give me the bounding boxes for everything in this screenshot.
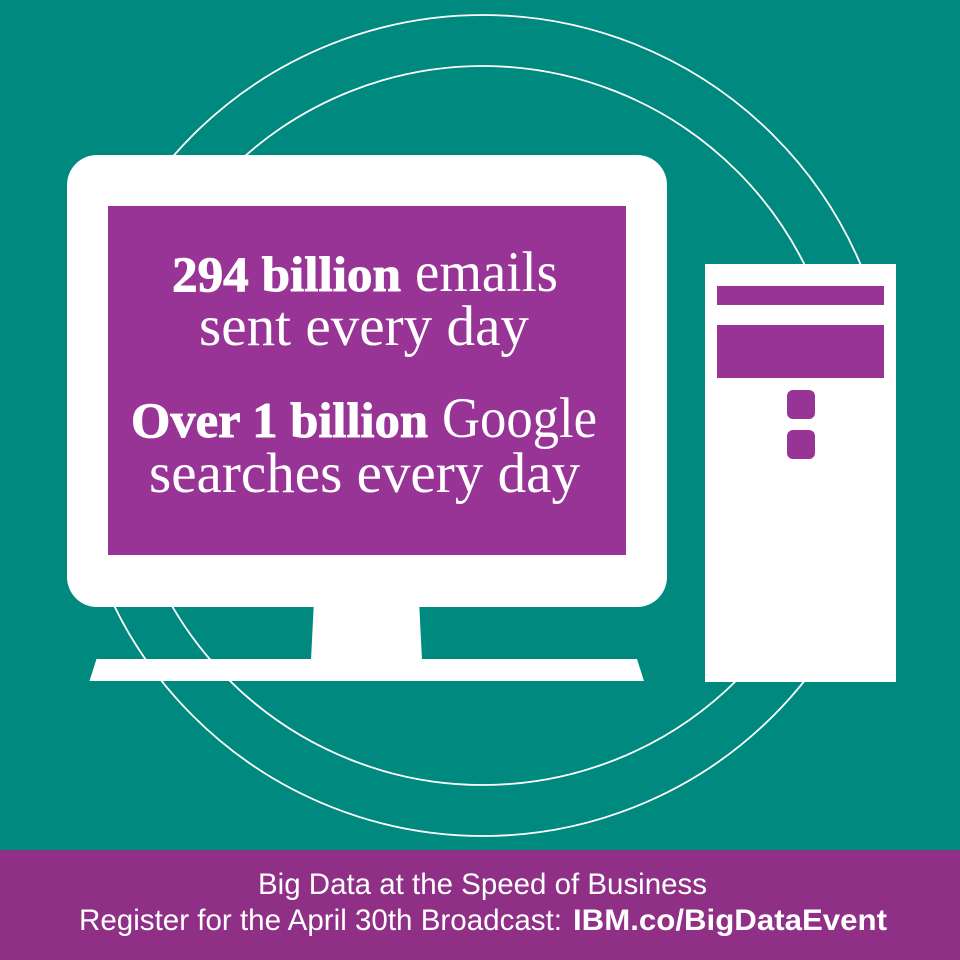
monitor screen xyxy=(108,206,626,555)
icon: computer monitor xyxy=(67,155,667,681)
statistics text xyxy=(131,241,597,505)
footer bar xyxy=(0,850,960,960)
monitor frame xyxy=(67,155,667,607)
stat: Google searches: Over 1 billion xyxy=(131,392,428,448)
button xyxy=(787,430,815,459)
tower body xyxy=(705,264,896,682)
monitor stand xyxy=(311,600,422,660)
concentric circles xyxy=(72,15,894,836)
monitor base xyxy=(90,659,644,681)
button xyxy=(787,390,815,419)
footer call to action: IBM.co/BigDataEvent xyxy=(573,904,887,937)
drive slot xyxy=(717,286,884,305)
stat: emails: sent every day xyxy=(199,295,529,358)
footer call to action xyxy=(79,904,887,937)
stat: emails: 294 billion xyxy=(172,246,401,302)
stat: Google searches: searches every day xyxy=(149,442,580,505)
stat: Google searches: Google xyxy=(442,387,597,450)
stat: Google searches xyxy=(131,387,597,505)
drive bay xyxy=(717,325,884,378)
stat: emails: emails xyxy=(415,241,558,304)
icon: computer tower xyxy=(705,264,896,682)
footer title: Big Data at the Speed of Business xyxy=(258,868,707,901)
stat: emails xyxy=(172,241,558,358)
footer call to action: Register for the April 30th Broadcast: xyxy=(79,904,562,937)
